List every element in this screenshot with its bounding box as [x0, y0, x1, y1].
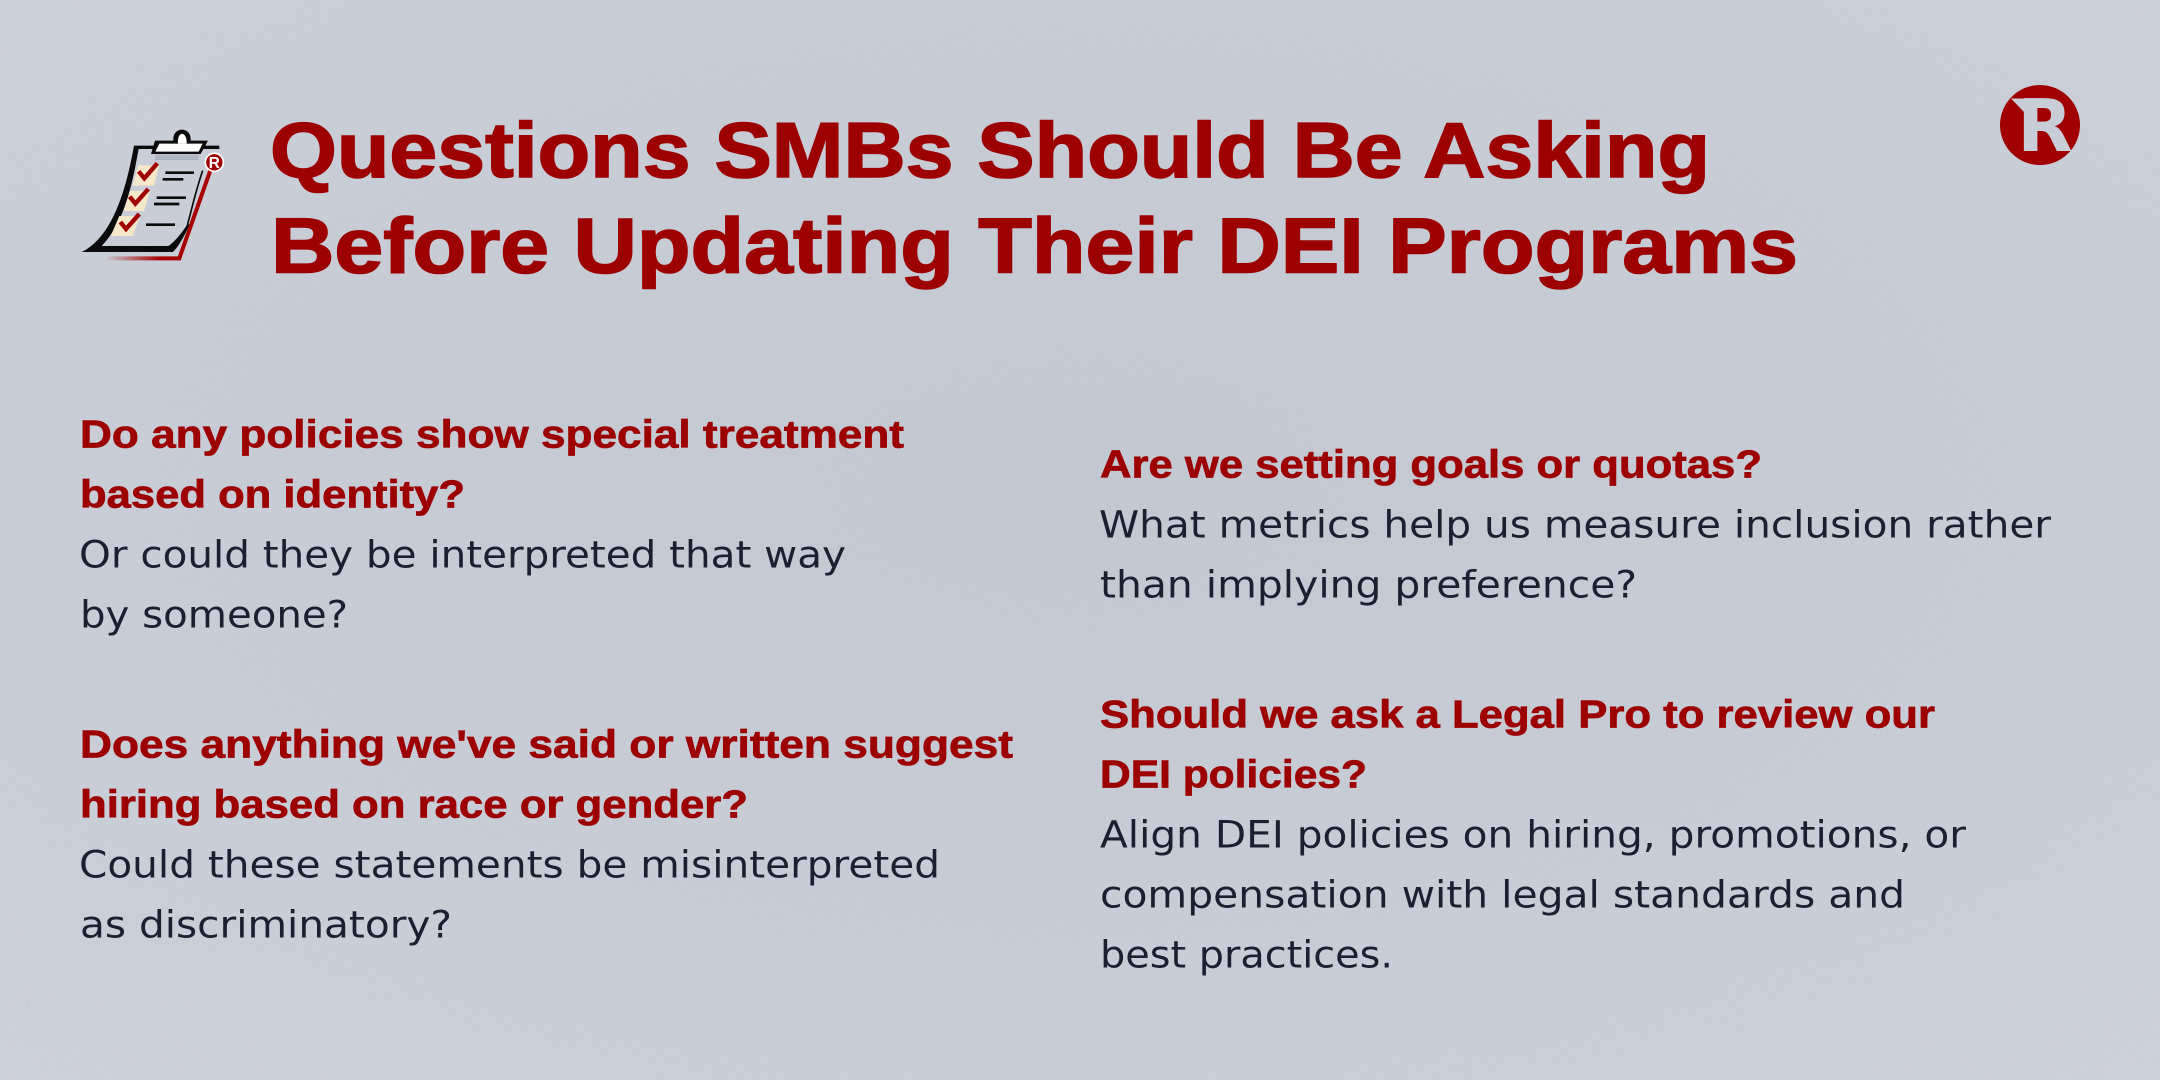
question block: goals or quotas: What metrics help us measure inclusion rather — [1099, 504, 2052, 547]
question block: special treatment: Or could they be interpreted that way — [79, 534, 846, 577]
question block: legal review: Should we ask a Legal Pro to review our — [1100, 694, 1935, 737]
question block: goals or quotas: Are we setting goals or quotas? — [1100, 444, 1762, 487]
question block: special treatment: by someone? — [80, 594, 348, 637]
question block: hiring statements — [79, 724, 1013, 947]
icon: clipboard checklist — [82, 130, 223, 258]
question block: legal review: DEI policies? — [1100, 754, 1367, 797]
icon: R logo: R — [2017, 84, 2073, 168]
icon: clipboard checklist: R — [209, 155, 220, 172]
question block: legal review: Align DEI policies on hiring, promotions, or — [1100, 814, 1967, 857]
title — [270, 106, 1798, 290]
question block: hiring statements: Could these statements be misinterpreted — [79, 844, 940, 887]
question block: hiring statements: Does anything we've said or written suggest — [80, 724, 1013, 767]
title: Before Updating Their DEI Programs — [271, 202, 1798, 290]
question block: legal review — [1100, 694, 1967, 977]
question block: goals or quotas — [1099, 444, 2052, 607]
question block: hiring statements: as discriminatory? — [80, 904, 452, 947]
question block: hiring statements: hiring based on race or gender? — [80, 784, 748, 827]
question block: special treatment — [79, 414, 904, 637]
question block: special treatment: based on identity? — [80, 474, 465, 517]
question block: goals or quotas: than implying preference? — [1100, 564, 1637, 607]
question block: special treatment: Do any policies show special treatment — [80, 414, 904, 457]
question block: legal review: best practices. — [1100, 934, 1393, 977]
title: Questions SMBs Should Be Asking — [270, 106, 1710, 194]
icon: R logo — [2000, 84, 2080, 168]
question block: legal review: compensation with legal standards and — [1100, 874, 1905, 917]
